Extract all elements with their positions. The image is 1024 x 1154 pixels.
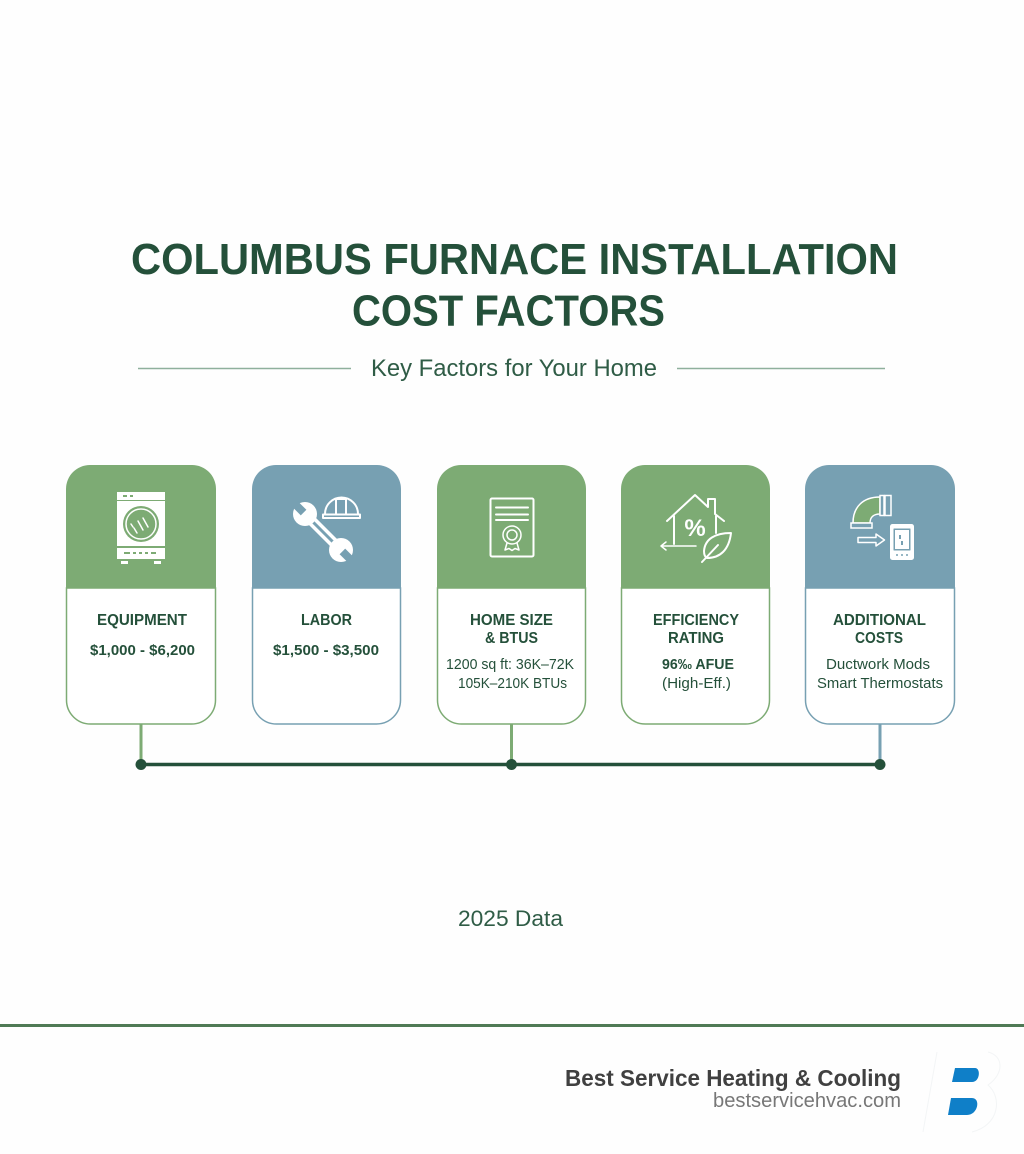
panel: efficiency rating: RATING — [668, 630, 724, 647]
title: COLUMBUS FURNACE INSTALLATION — [131, 236, 898, 284]
panel: additional costs: Ductwork Mods — [826, 656, 930, 673]
subtitle with rules: Key Factors for Your Home — [371, 355, 657, 382]
icon: wrench and hard hat — [292, 498, 360, 563]
panel: efficiency rating — [621, 465, 770, 724]
connector timeline — [136, 724, 886, 770]
icon: house with percent and leaf: % — [684, 515, 706, 542]
icon: certificate document — [490, 498, 534, 556]
panel: additional costs: COSTS — [855, 630, 903, 647]
icon: duct elbow, arrow and thermostat — [851, 496, 914, 560]
panel: labor — [252, 465, 401, 724]
title: COST FACTORS — [352, 288, 665, 336]
icon: brand logo — [923, 1052, 1000, 1132]
panel: labor: LABOR — [301, 612, 352, 629]
footer brand text — [565, 1065, 901, 1112]
footer brand text: Best Service Heating & Cooling — [565, 1065, 901, 1091]
panel: home size: 1200 sq ft: 36K–72K — [446, 656, 574, 673]
footer divider — [0, 1024, 1024, 1027]
panel: home size: 105K–210K BTUs — [458, 675, 567, 692]
data year note: 2025 Data — [458, 906, 564, 931]
icon: house with percent and leaf — [661, 495, 731, 562]
panel: efficiency rating: 96‰ AFUE — [662, 656, 734, 673]
panel: home size — [437, 465, 586, 724]
title — [131, 236, 898, 336]
panel: labor: $1,500 - $3,500 — [273, 642, 379, 659]
panel: efficiency rating: (High-Eff.) — [662, 675, 731, 692]
panel: additional costs: Smart Thermostats — [817, 675, 943, 692]
panel: equipment — [66, 465, 216, 724]
panel: equipment: $1,000 - $6,200 — [90, 642, 195, 659]
panel: efficiency rating: EFFICIENCY — [653, 612, 740, 629]
footer brand text: bestservicehvac.com — [713, 1090, 901, 1112]
panel: additional costs — [805, 465, 955, 724]
panel: home size: HOME SIZE — [470, 612, 553, 629]
panel: additional costs: ADDITIONAL — [833, 612, 926, 629]
panel: home size: & BTUS — [485, 630, 538, 647]
icon: furnace — [117, 492, 165, 564]
panel: equipment: EQUIPMENT — [97, 612, 188, 629]
